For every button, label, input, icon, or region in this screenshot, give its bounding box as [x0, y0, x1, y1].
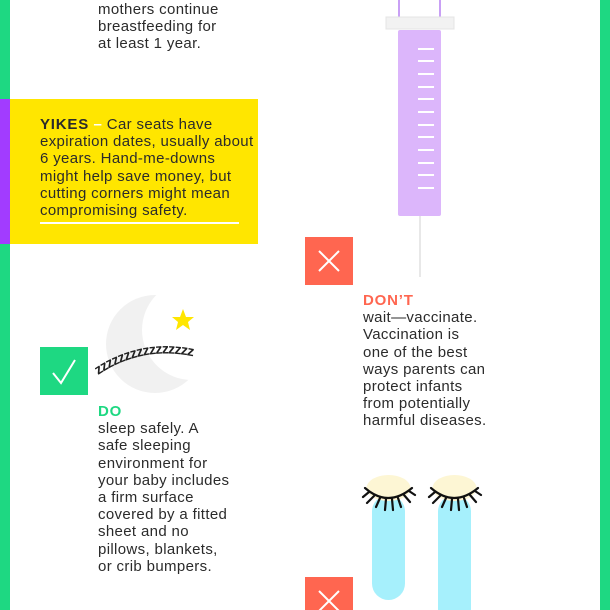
- panel: yikes callout: might help save money, but: [40, 168, 231, 185]
- text: don't vaccinate: from potentially: [363, 395, 470, 412]
- text: do sleep safely: [98, 403, 229, 575]
- icon: X box vaccinate: [305, 237, 353, 285]
- panel: yikes callout: YIKES – Car seats have: [40, 116, 213, 133]
- text: breastfeeding: at least 1 year.: [98, 35, 201, 52]
- panel: yikes callout: compromising safety.: [40, 202, 188, 219]
- text: breastfeeding: mothers continue: [98, 1, 219, 18]
- text: don't vaccinate: one of the best: [363, 344, 468, 361]
- text: do sleep safely: DO: [98, 403, 122, 420]
- panel: yikes callout: expiration dates, usually about: [40, 133, 253, 150]
- text: do sleep safely: sheet and no: [98, 523, 189, 540]
- text: don't vaccinate: wait—vaccinate.: [363, 309, 477, 326]
- text: do sleep safely: or crib bumpers.: [98, 558, 212, 575]
- text: breastfeeding: breastfeeding for: [98, 18, 217, 35]
- text: do sleep safely: safe sleeping: [98, 437, 191, 454]
- text: do sleep safely: a firm surface: [98, 489, 194, 506]
- left green border: [0, 0, 10, 610]
- icon: syringe: [386, 0, 454, 277]
- panel: yikes callout: cutting corners might mean: [40, 185, 230, 202]
- icon: crying eyes: [362, 475, 482, 610]
- text: do sleep safely: pillows, blankets,: [98, 541, 218, 558]
- panel: yikes callout: [0, 99, 258, 244]
- icon: check box: [40, 347, 88, 395]
- text: don't vaccinate: harmful diseases.: [363, 412, 487, 429]
- icon: X box bottom: [305, 577, 353, 610]
- text: don't vaccinate: [363, 292, 487, 429]
- right green border: [600, 0, 610, 610]
- text: don't vaccinate: protect infants: [363, 378, 462, 395]
- text: do sleep safely: sleep safely. A: [98, 420, 199, 437]
- text: don't vaccinate: Vaccination is: [363, 326, 459, 343]
- icon: moon with zzz and star: [95, 295, 194, 393]
- text: breastfeeding: [98, 1, 219, 52]
- text: don't vaccinate: ways parents can: [363, 361, 485, 378]
- text: do sleep safely: covered by a fitted: [98, 506, 227, 523]
- text: do sleep safely: your baby includes: [98, 472, 229, 489]
- panel: yikes callout: 6 years. Hand-me-downs: [40, 150, 215, 167]
- text: don't vaccinate: DON’T: [363, 292, 414, 309]
- text: do sleep safely: environment for: [98, 455, 207, 472]
